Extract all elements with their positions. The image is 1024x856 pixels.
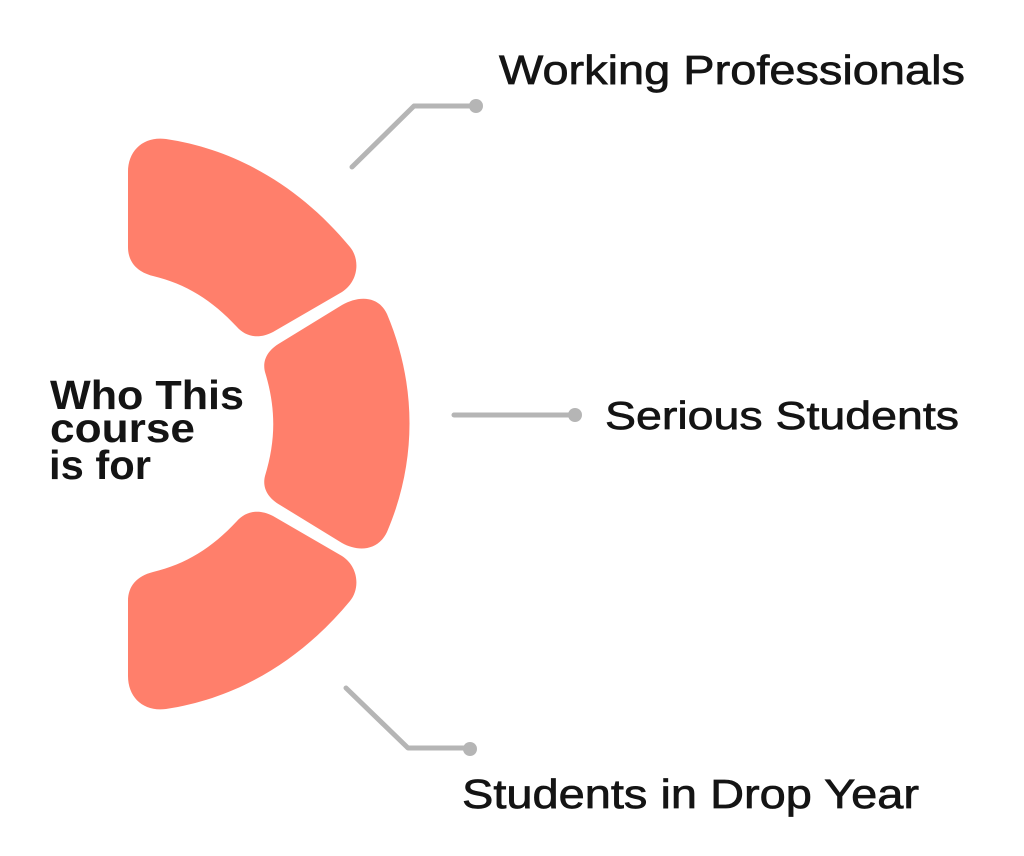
connector: middle [454,408,582,422]
heading: who this course is for [49,372,244,488]
label: working professionals: Working Professionals [499,47,965,93]
heading: who this course is for: Who This [50,372,244,418]
segment: bottom [128,512,356,709]
connector: bottom [346,688,477,756]
segment: middle [264,299,410,548]
heading: who this course is for: is for [49,442,151,488]
segment: top [128,139,356,336]
heading: who this course is for: course [50,405,195,451]
connector: top [352,99,483,167]
label: serious students: Serious Students [605,395,959,438]
label: students in drop year: Students in Drop Year [462,771,919,817]
